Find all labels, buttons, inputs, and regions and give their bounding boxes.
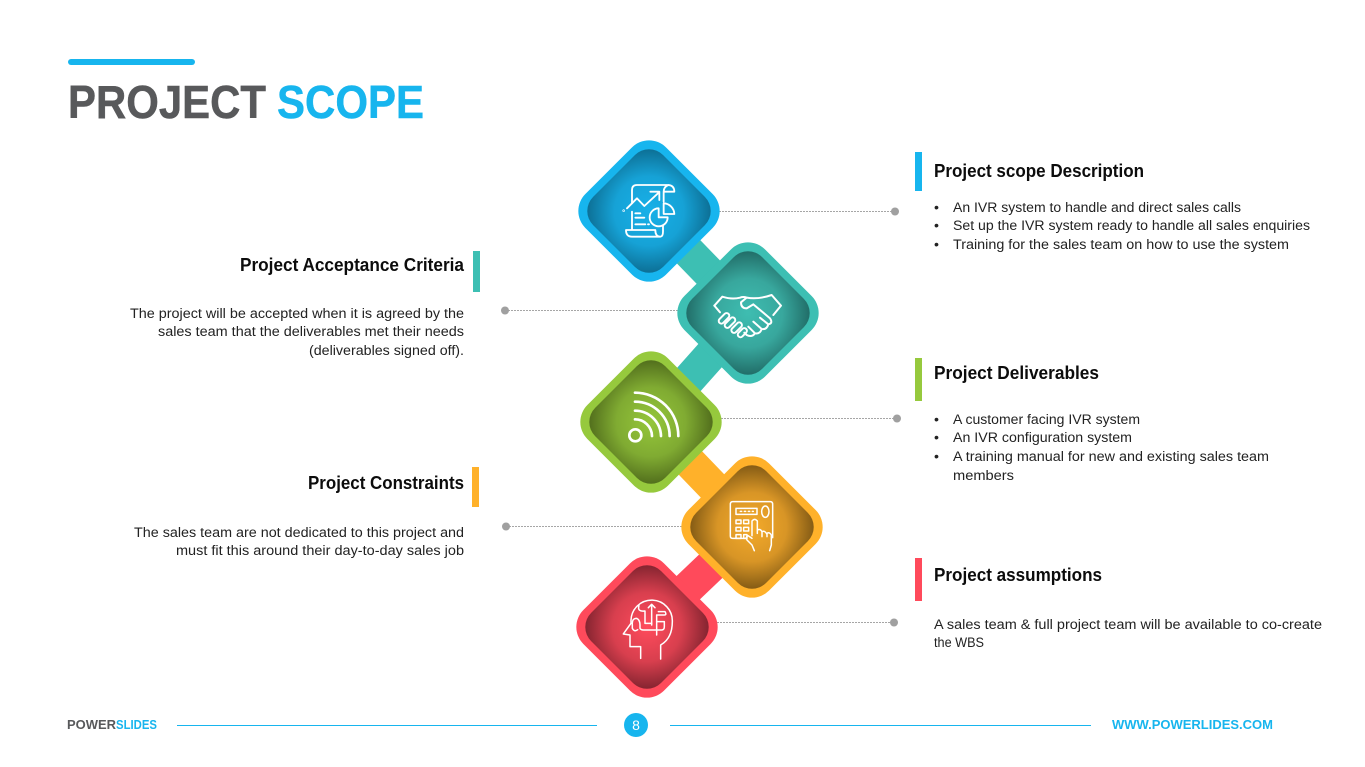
leader line: constraints: [502, 522, 684, 530]
connector bands: [647, 211, 752, 627]
title: PROJECT: [68, 76, 266, 128]
panel: project deliverables: [915, 358, 1269, 484]
title: SCOPE: [277, 76, 424, 128]
leader line: assumptions: [714, 618, 898, 626]
bullet list: A customer facing IVR system: [953, 412, 1140, 428]
body text: must fit this around their day-to-day sales job: [176, 543, 464, 559]
icon: handshake: [714, 295, 781, 338]
heading: Project assumptions: [934, 565, 1102, 585]
leader line: deliverables: [718, 414, 901, 422]
bullet list: •: [934, 237, 939, 253]
panel: project scope description: [915, 152, 1310, 253]
footer brand: SLIDES: [116, 717, 157, 732]
body text: the WBS: [934, 635, 984, 651]
body text: [134, 525, 464, 559]
accent bar: orange: [472, 467, 479, 507]
bullet list: An IVR configuration system: [953, 430, 1132, 446]
title accent bar: [68, 59, 195, 65]
body text: A sales team & full project team will be available to co-create: [934, 617, 1322, 633]
bullet list: members: [953, 468, 1014, 484]
panel: project assumptions: [915, 558, 1322, 651]
bullet list: •: [934, 449, 939, 465]
bullet list: •: [934, 430, 939, 446]
body text: The sales team are not dedicated to this project and: [134, 525, 464, 541]
panel: project acceptance criteria: [130, 251, 480, 359]
bullet list: •: [934, 218, 939, 234]
page number: [624, 713, 648, 737]
icon: head with maze: [623, 600, 672, 659]
body text: sales team that the deliverables met their needs: [158, 324, 464, 340]
accent bar: teal: [473, 251, 480, 292]
panel: project constraints: [134, 467, 479, 559]
accent bar: green: [915, 358, 922, 401]
diamond: orange keypad: [671, 446, 833, 608]
body text: [934, 617, 1322, 651]
bullet list: [934, 200, 1310, 253]
title: [68, 76, 424, 128]
bullet list: Set up the IVR system ready to handle all sales enquiries: [953, 218, 1310, 234]
diamond: red mind: [566, 546, 728, 708]
bullet list: An IVR system to handle and direct sales calls: [953, 200, 1241, 216]
body text: (deliverables signed off).: [309, 343, 464, 359]
icon: keypad and hand: [730, 502, 773, 551]
bullet list: •: [934, 200, 939, 216]
bullet list: •: [934, 412, 939, 428]
footer brand: POWER: [67, 717, 117, 732]
body text: The project will be accepted when it is agreed by the: [130, 306, 464, 322]
heading: Project Constraints: [308, 473, 464, 493]
accent bar: blue: [915, 152, 922, 191]
footer: [67, 713, 1273, 737]
heading: Project Acceptance Criteria: [240, 255, 465, 275]
leader line: acceptance criteria: [501, 306, 680, 314]
heading: Project Deliverables: [934, 363, 1099, 383]
diamond: teal handshake: [667, 232, 829, 394]
bullet list: Training for the sales team on how to use the system: [953, 237, 1289, 253]
bullet list: A training manual for new and existing sales team: [953, 449, 1269, 465]
leader line: scope description: [716, 208, 899, 216]
icon: report with chart: [623, 185, 674, 237]
footer website: WWW.POWERLIDES.COM: [1112, 717, 1273, 732]
heading: Project scope Description: [934, 161, 1144, 181]
accent bar: red: [915, 558, 922, 601]
icon: wireless signal: [629, 393, 678, 441]
body text: [130, 306, 464, 359]
page number: 8: [632, 717, 640, 733]
diamond: green signal: [570, 341, 732, 503]
diamond: blue report: [568, 130, 730, 292]
footer brand: [67, 717, 157, 732]
bullet list: [934, 412, 1269, 484]
